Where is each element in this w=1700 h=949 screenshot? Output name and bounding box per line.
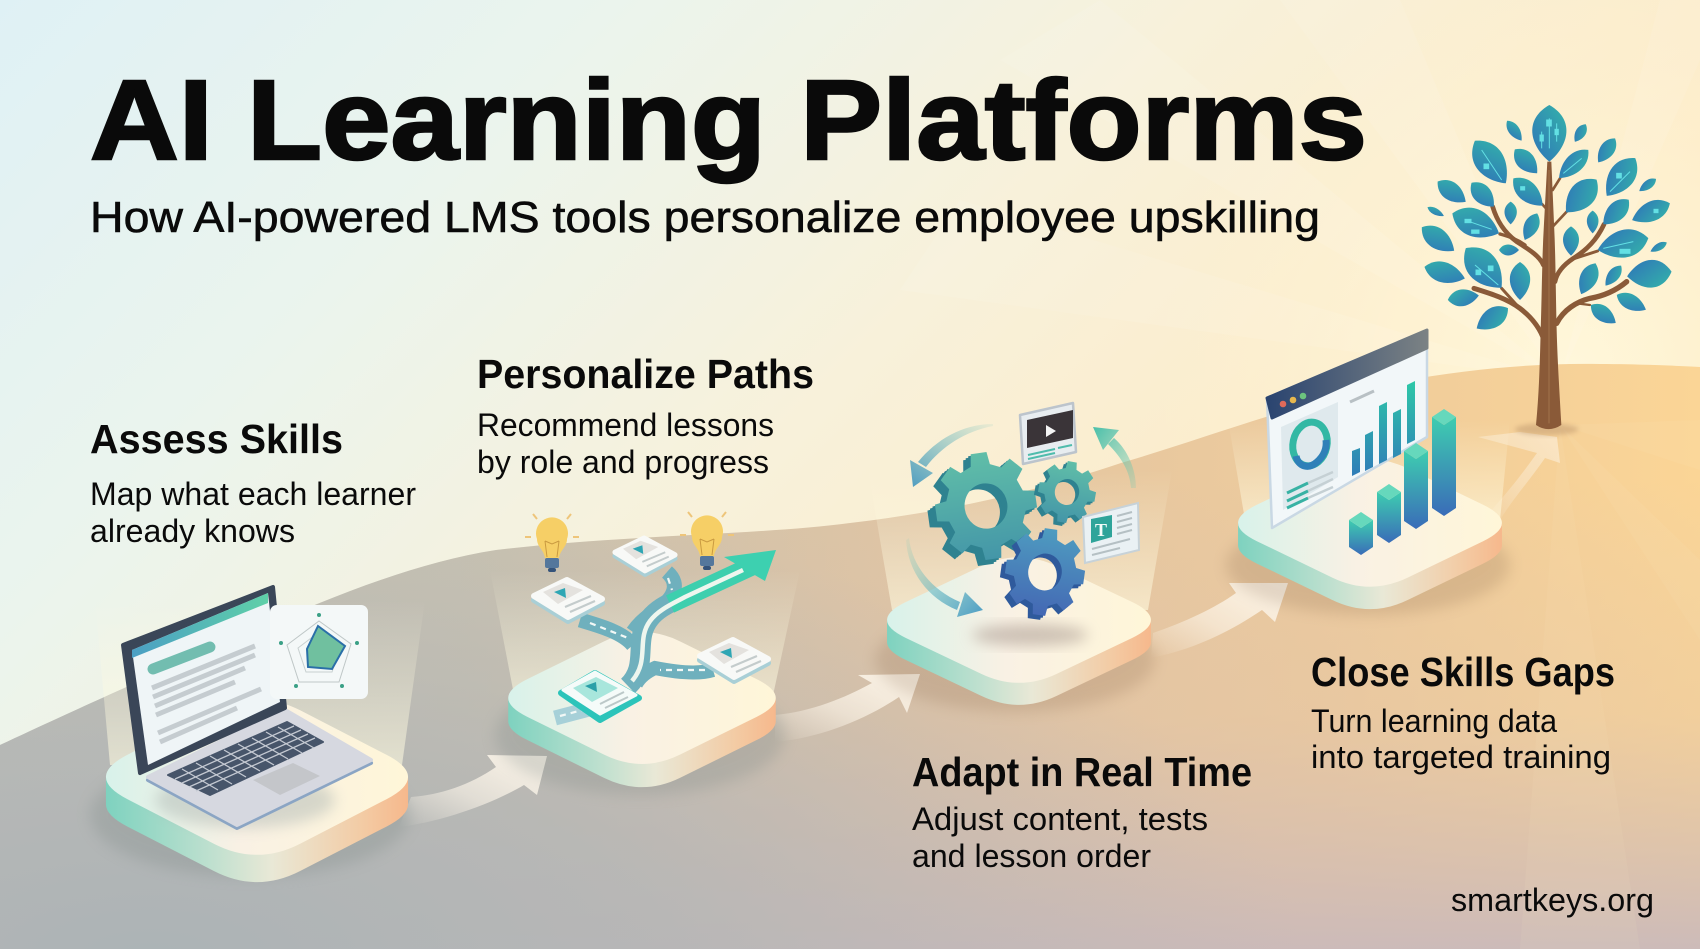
step 2 platform	[490, 570, 800, 795]
step 3 text: Adapt in Real Time: Adjust content, tests	[912, 801, 1208, 837]
large gear	[921, 446, 1043, 572]
step 1 text: Assess Skills: Assess Skills	[90, 416, 343, 462]
cycle arrows	[906, 424, 1136, 617]
step 4 text: Close Skills Gaps	[1311, 649, 1615, 775]
leaves	[1416, 105, 1674, 337]
step 3 platform	[868, 470, 1172, 712]
video card	[1020, 403, 1076, 464]
branches	[1474, 178, 1627, 340]
step 1 platform	[90, 600, 425, 882]
text card	[1083, 503, 1139, 563]
step 2 text: Personalize Paths: Personalize Paths	[477, 351, 814, 397]
step 1 text: Assess Skills: Map what each learner	[90, 476, 416, 512]
3D bars	[1349, 409, 1456, 555]
title: AI Learning Platforms	[90, 57, 1367, 183]
icon: rotating gears	[906, 403, 1139, 625]
step 4 text: Close Skills Gaps: into targeted training	[1311, 739, 1611, 775]
dashboard window	[1267, 330, 1427, 528]
icon: idea bulb right	[680, 512, 734, 570]
arrow: step 1 to 2	[399, 755, 547, 827]
icon: growth tree	[1416, 105, 1674, 435]
arrow: step 3 to 4	[1151, 583, 1288, 658]
subtitle: How AI-powered LMS tools personalize employee upskilling	[90, 193, 1320, 242]
step 3 text: Adapt in Real Time: and lesson order	[912, 838, 1151, 874]
step 2 text: Personalize Paths	[477, 351, 814, 480]
icon: analytics dashboard	[1267, 330, 1456, 555]
step 4 platform	[1226, 420, 1510, 615]
path lesson cards	[534, 538, 768, 720]
small gear	[1029, 457, 1101, 530]
step 4 text: Close Skills Gaps: Close Skills Gaps	[1311, 649, 1615, 695]
trunk	[1536, 162, 1561, 429]
step 3 text: Adapt in Real Time	[912, 749, 1252, 874]
step 4 text: Close Skills Gaps: Turn learning data	[1311, 703, 1557, 739]
icon: branching learning paths	[534, 538, 776, 720]
arrow: step 2 to 3	[775, 674, 920, 742]
step 1 text: Assess Skills	[90, 416, 416, 549]
step 2 text: Personalize Paths: by role and progress	[477, 444, 769, 480]
footer site name: smartkeys.org	[1451, 882, 1654, 918]
blue gear	[995, 523, 1090, 625]
leaf circuit details	[1465, 118, 1658, 285]
step 1 text: Assess Skills: already knows	[90, 513, 295, 549]
icon: laptop with skills radar	[123, 587, 371, 828]
icon: idea bulb left	[525, 514, 579, 572]
arrow: step 4 to tree	[1478, 432, 1560, 520]
radar card	[270, 605, 368, 699]
step 3 text: Adapt in Real Time: Adapt in Real Time	[912, 749, 1252, 795]
text card: T	[1095, 520, 1107, 540]
ground hill	[0, 364, 1700, 949]
step 2 text: Personalize Paths: Recommend lessons	[477, 407, 774, 443]
